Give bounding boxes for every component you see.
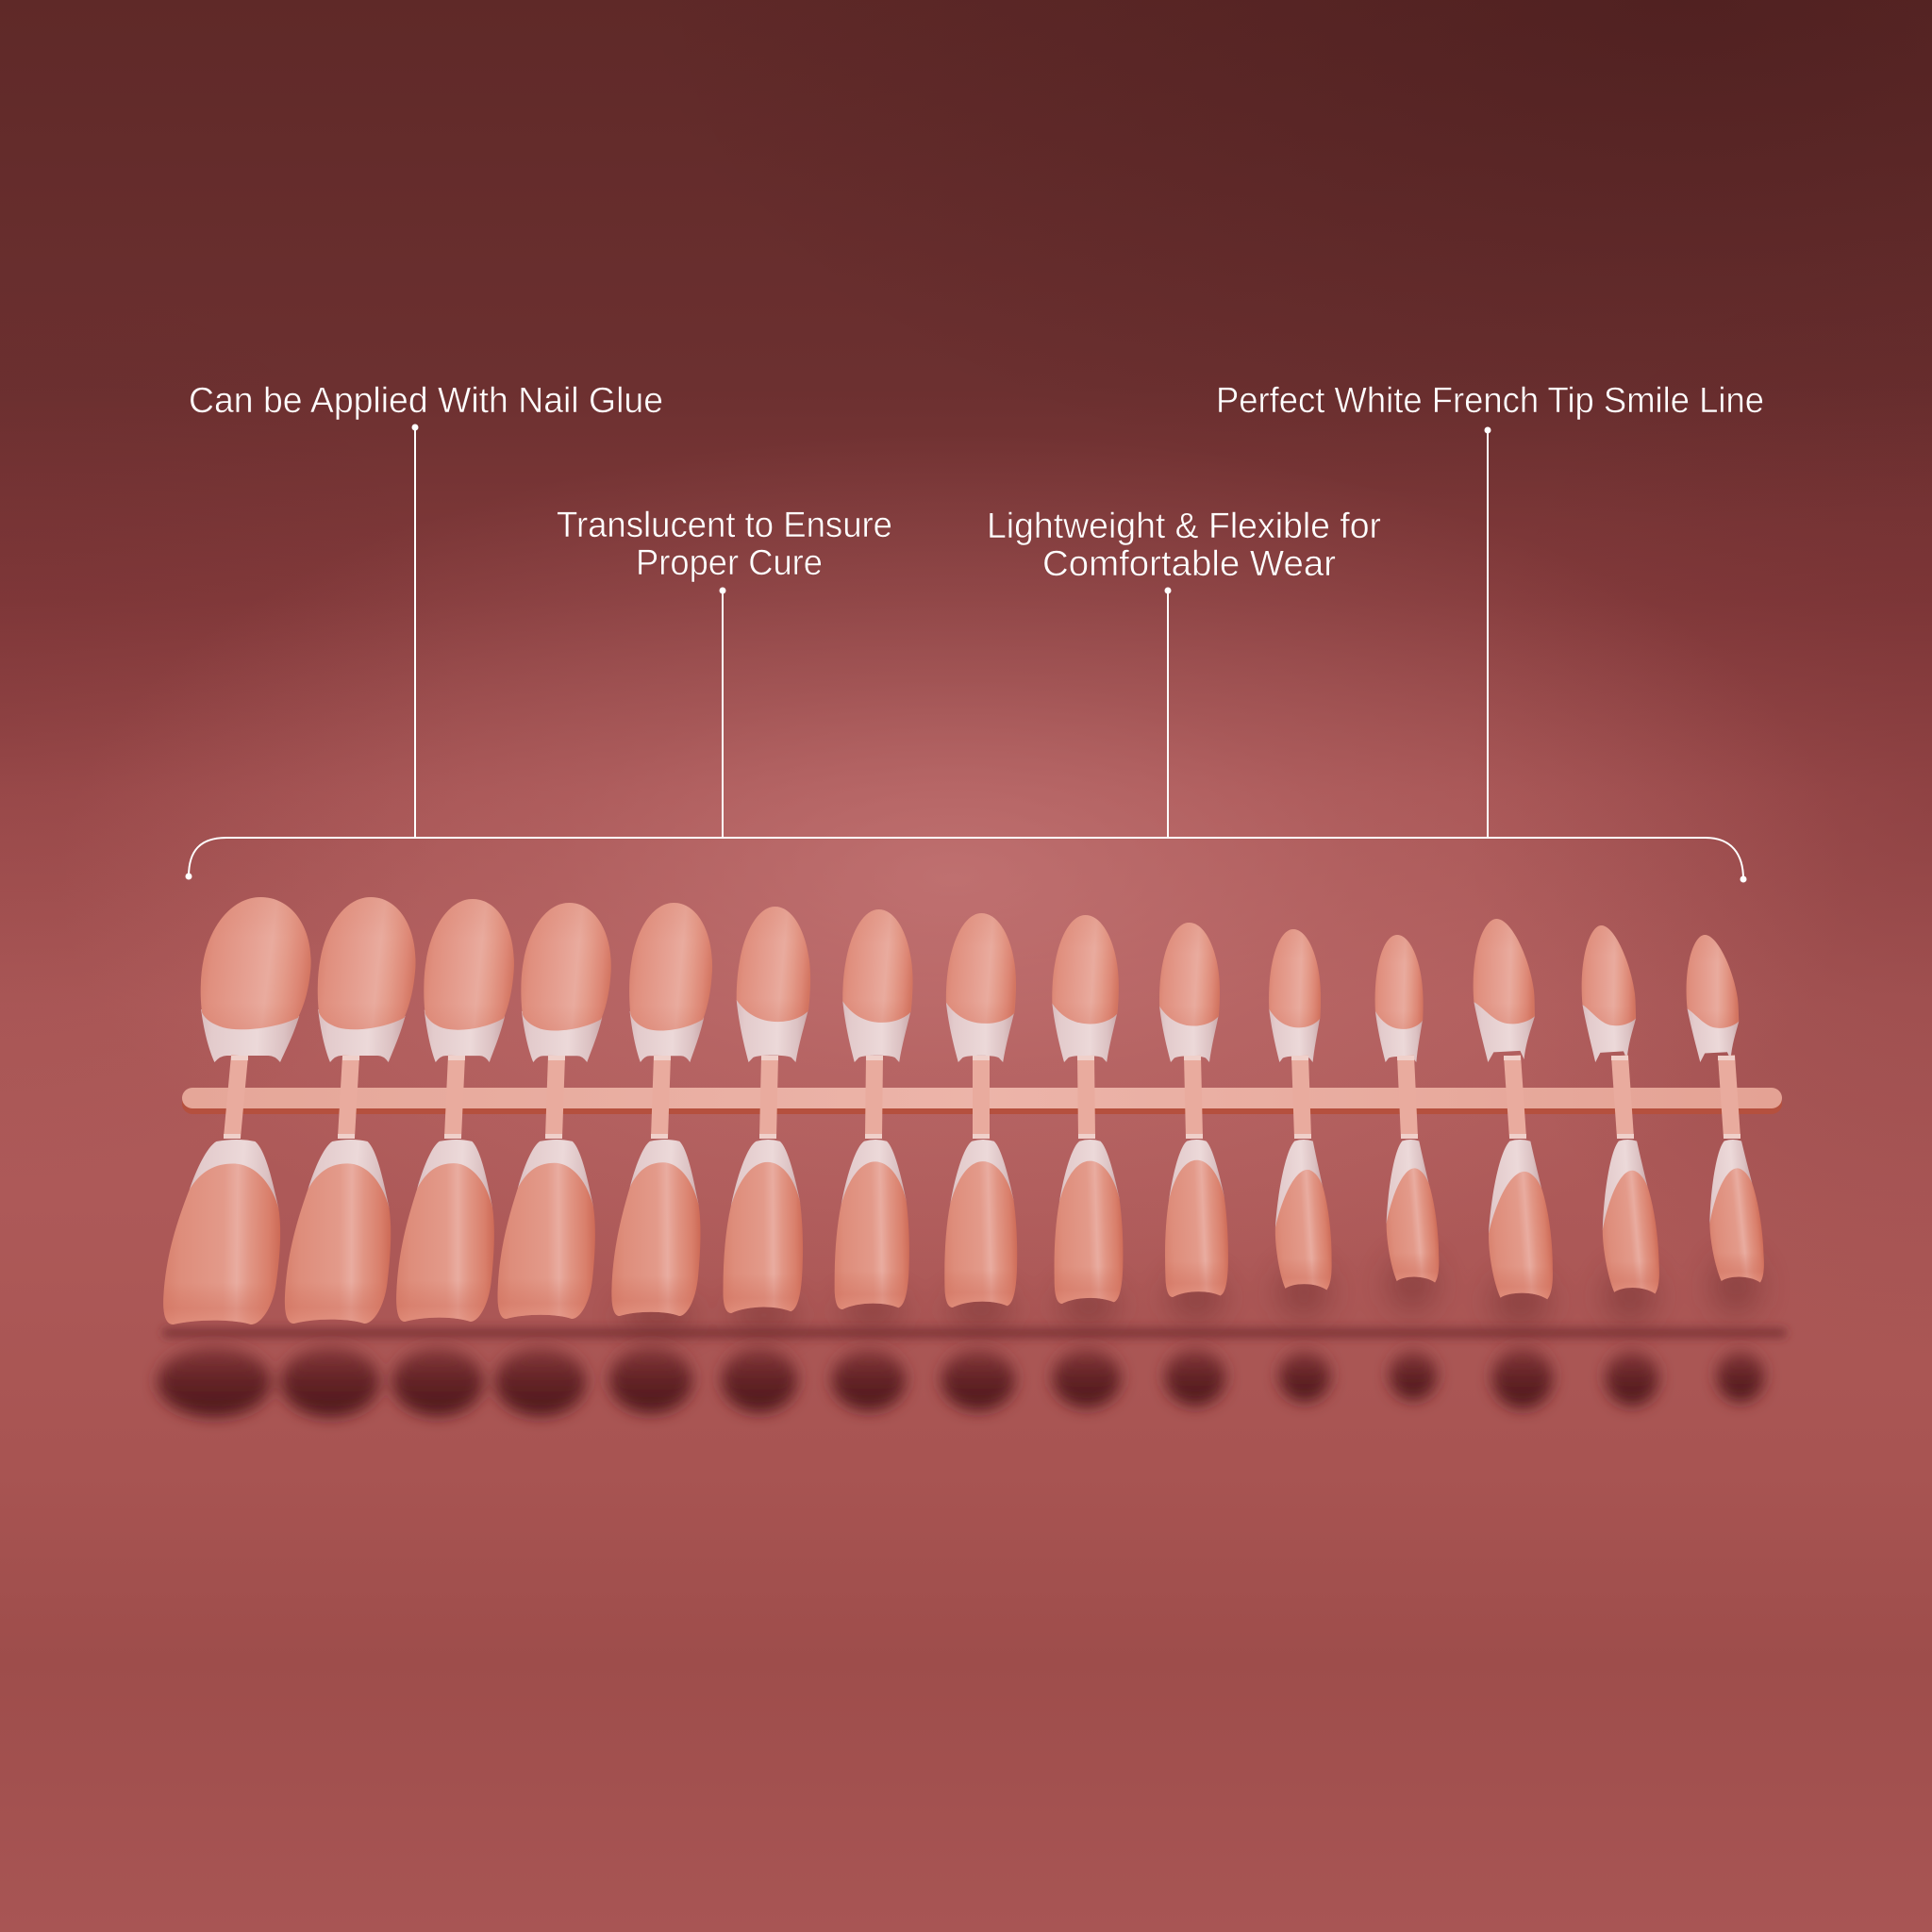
nail pair 13 — [1471, 919, 1555, 1299]
nail pair 15 — [1683, 935, 1766, 1282]
nail pair 8 — [944, 913, 1018, 1307]
nail pair 10 — [1158, 923, 1228, 1297]
label: french tip: Perfect White French Tip Smile Line — [1216, 381, 1764, 421]
nail shadows on the floor — [158, 1347, 1764, 1417]
leader line: lightweight — [1164, 587, 1172, 838]
nail pair 6 — [723, 907, 811, 1313]
nail pair 2 — [283, 897, 418, 1324]
stems connecting nails to bar — [232, 1056, 1732, 1138]
nail pair 14 — [1579, 925, 1661, 1293]
leader line: nail glue — [411, 425, 419, 838]
label: translucent: Proper Cure — [636, 543, 823, 583]
leader line: french tip — [1485, 426, 1491, 838]
stem tabs — [224, 1056, 1740, 1139]
label: translucent: Translucent to Ensure — [557, 506, 892, 545]
bracket over the nails — [189, 838, 1743, 879]
nail pair 12 — [1373, 935, 1441, 1282]
nail pair 5 — [611, 903, 713, 1316]
nail pair 3 — [395, 899, 516, 1322]
nail pair 1 — [162, 897, 313, 1324]
label: nail glue: Can be Applied With Nail Glue — [189, 381, 663, 421]
label: translucent — [557, 506, 892, 583]
bar shadow on the floor — [162, 1328, 1787, 1338]
label: lightweight: Comfortable Wear — [1042, 544, 1336, 584]
nail pair 9 — [1052, 915, 1123, 1304]
leader line: translucent — [719, 587, 726, 838]
horizontal carrier bar — [182, 1088, 1782, 1114]
bracket end dots — [185, 874, 1747, 883]
soft shadows below the nails — [620, 1257, 1760, 1336]
nail pair 11 — [1267, 929, 1333, 1290]
nail pair 4 — [496, 903, 612, 1319]
label: lightweight: Lightweight & Flexible for — [987, 507, 1381, 546]
label: lightweight — [987, 507, 1381, 584]
nail pair 7 — [834, 909, 913, 1309]
